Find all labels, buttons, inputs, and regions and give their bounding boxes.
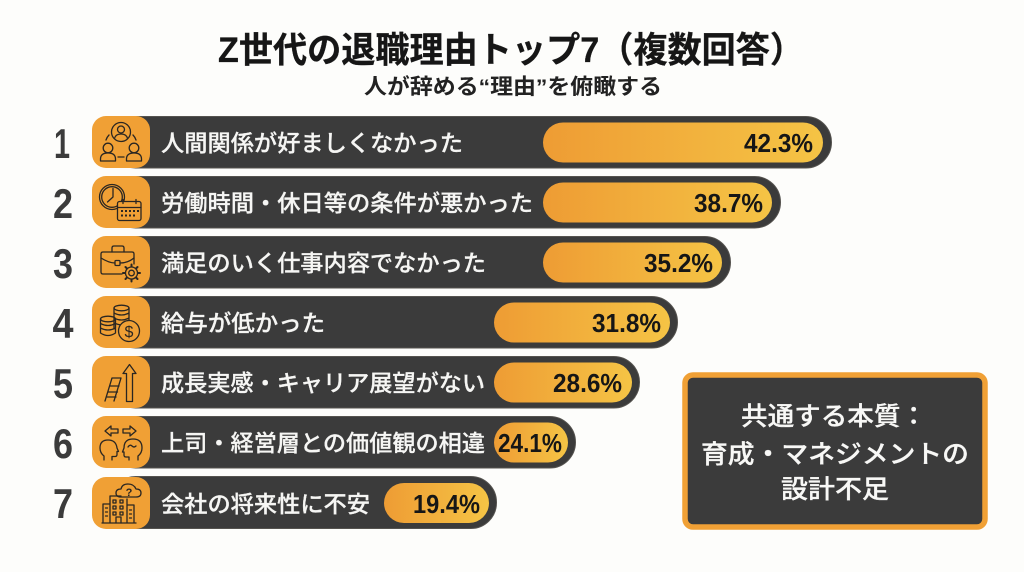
rank number 7: 7 <box>53 480 73 527</box>
rank number 2: 2 <box>53 180 73 227</box>
bar background 1 <box>110 116 832 168</box>
icon: building and question cloud <box>92 477 150 529</box>
label 1: 人間関係が好ましくなかった <box>161 130 463 156</box>
value bar 7 <box>384 483 489 523</box>
bar background 2 <box>110 176 780 228</box>
callout text: 共通する本質： <box>741 403 927 431</box>
rank number 5: 5 <box>53 360 73 407</box>
rank number 1: 1 <box>54 120 70 167</box>
title: Z世代の退職理由トップ7（複数回答） <box>218 30 804 70</box>
rank 2 row <box>53 176 780 228</box>
rank number 4: 4 <box>52 300 74 347</box>
callout text <box>701 403 969 504</box>
callout text: 育成・マネジメントの <box>701 441 969 469</box>
label 4: 給与が低かった <box>161 310 325 336</box>
rank 1 row <box>54 116 832 168</box>
value bar 2 <box>543 182 772 222</box>
rank 6 row <box>53 416 576 468</box>
bar background 3 <box>110 236 730 288</box>
callout: common essence <box>685 375 985 527</box>
icon: coins <box>92 296 150 348</box>
question mark: ? <box>126 487 133 499</box>
value bar 6 <box>494 422 568 462</box>
icon: clock and calendar <box>92 176 150 228</box>
value 7: 19.4% <box>413 489 480 519</box>
bar background 6 <box>110 416 576 468</box>
callout text: 設計不足 <box>781 476 889 504</box>
value bar 3 <box>543 242 722 282</box>
value 6: 24.1% <box>498 428 562 458</box>
rank 4 row <box>52 296 678 348</box>
label 7: 会社の将来性に不安 <box>161 491 370 517</box>
label 6: 上司・経営層との価値観の相違 <box>161 430 485 456</box>
subtitle: 人が辞める“理由”を俯瞰する <box>364 74 662 99</box>
rank number 6: 6 <box>53 420 73 467</box>
icon: ladder and arrow <box>92 356 150 408</box>
value 1: 42.3% <box>744 128 813 158</box>
icon: briefcase and gear <box>92 236 150 288</box>
label 2: 労働時間・休日等の条件が悪かった <box>161 190 533 216</box>
value 2: 38.7% <box>694 188 763 218</box>
rank 7 row <box>53 476 496 529</box>
value bar 1 <box>543 122 823 162</box>
icon: two heads with arrows <box>92 416 150 468</box>
value bar 4 <box>494 302 670 342</box>
value 5: 28.6% <box>553 368 622 398</box>
icon: people network <box>92 116 150 168</box>
label 5: 成長実感・キャリア展望がない <box>161 370 485 396</box>
bar background 5 <box>110 356 640 408</box>
label 3: 満足のいく仕事内容でなかった <box>161 250 486 276</box>
rank number 3: 3 <box>53 240 73 287</box>
bar background 4 <box>110 296 678 348</box>
value 4: 31.8% <box>592 308 661 338</box>
dollar sign: $ <box>125 324 134 341</box>
value 3: 35.2% <box>644 248 713 278</box>
rank 5 row <box>53 356 640 408</box>
rank 3 row <box>53 236 730 288</box>
bar background 7 <box>110 476 496 528</box>
value bar 5 <box>494 362 632 402</box>
